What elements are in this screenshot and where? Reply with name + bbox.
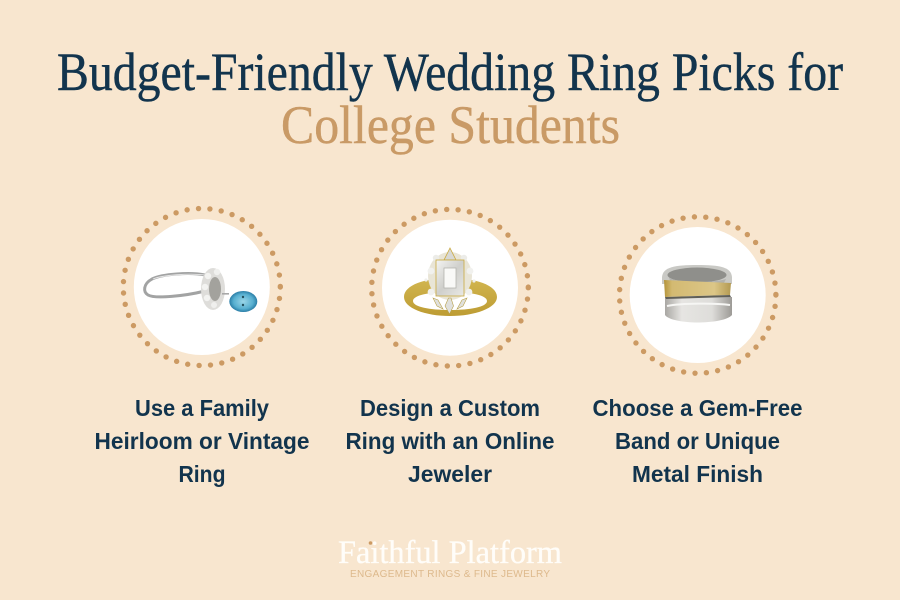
dotted ring 2 [372,209,528,366]
icon: gold ring with emerald-cut diamond [404,248,497,316]
logo: Faithful Platform: Faithful Platform [338,535,562,571]
label 2: Jeweler [408,461,492,487]
label 1: Heirloom or Vintage [94,428,310,454]
white circle 1 [134,219,270,355]
label 3 [592,395,802,487]
label 1: Use a Family [135,395,269,421]
label 3: Choose a Gem-Free [592,395,802,421]
label 3: Metal Finish [632,461,763,487]
title: College Students [281,95,620,155]
white circle 2 [382,220,518,356]
icon: stacked metal bands [662,265,732,322]
title [57,42,843,155]
panel: family heirloom ring [94,208,310,487]
panel: custom ring [346,209,554,487]
dotted ring 3 [620,217,776,373]
label 1: Ring [178,461,226,487]
dotted ring 1 [123,208,280,366]
label 2: Design a Custom [360,395,540,421]
label 2 [346,395,554,487]
label 2: Ring with an Online [346,428,554,454]
icon: silver ring with loose blue gem [145,268,257,312]
white circle 3 [630,227,766,363]
panel: gem-free band [592,217,802,487]
label 3: Band or Unique [615,428,780,454]
label 1 [94,395,310,487]
logo: Faithful Platform: ENGAGEMENT RINGS & FINE JEWELRY [350,569,550,580]
